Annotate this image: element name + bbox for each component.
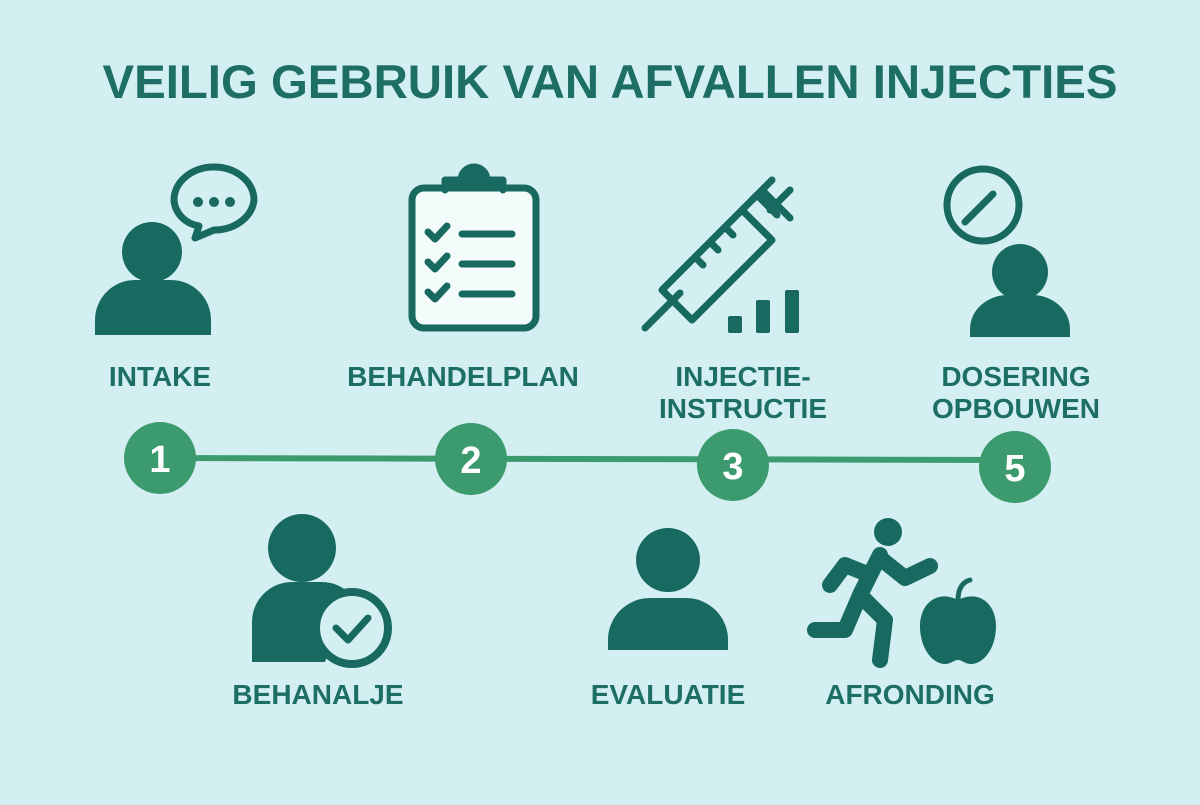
icon: person with check	[252, 514, 388, 664]
icon: clock and person	[947, 169, 1070, 337]
step labels bottom: BEHANALJE	[232, 679, 404, 710]
step labels top: INJECTIE-	[675, 361, 811, 392]
step labels bottom: EVALUATIE	[591, 679, 745, 710]
icon: person	[608, 528, 728, 650]
step labels top: OPBOUWEN	[932, 393, 1100, 424]
icon: person with speech bubble	[95, 167, 254, 335]
timeline	[124, 422, 1051, 503]
step labels bottom	[232, 679, 995, 710]
step labels top: DOSERING	[941, 361, 1091, 392]
icon: syringe	[645, 180, 790, 328]
step labels bottom: AFRONDING	[825, 679, 995, 710]
icon: clipboard checklist	[412, 167, 536, 328]
timeline: 2	[460, 440, 482, 482]
title: VEILIG GEBRUIK VAN AFVALLEN INJECTIES	[102, 55, 1118, 108]
step labels top	[109, 361, 1100, 424]
icon: bar chart	[728, 290, 799, 333]
step labels top: INSTRUCTIE	[659, 393, 827, 424]
timeline: 3	[722, 446, 744, 488]
timeline: 5	[1004, 448, 1026, 490]
icon: runner and apple	[815, 518, 996, 664]
step labels top: BEHANDELPLAN	[347, 361, 579, 392]
timeline: 1	[149, 439, 171, 481]
step labels top: INTAKE	[109, 361, 211, 392]
